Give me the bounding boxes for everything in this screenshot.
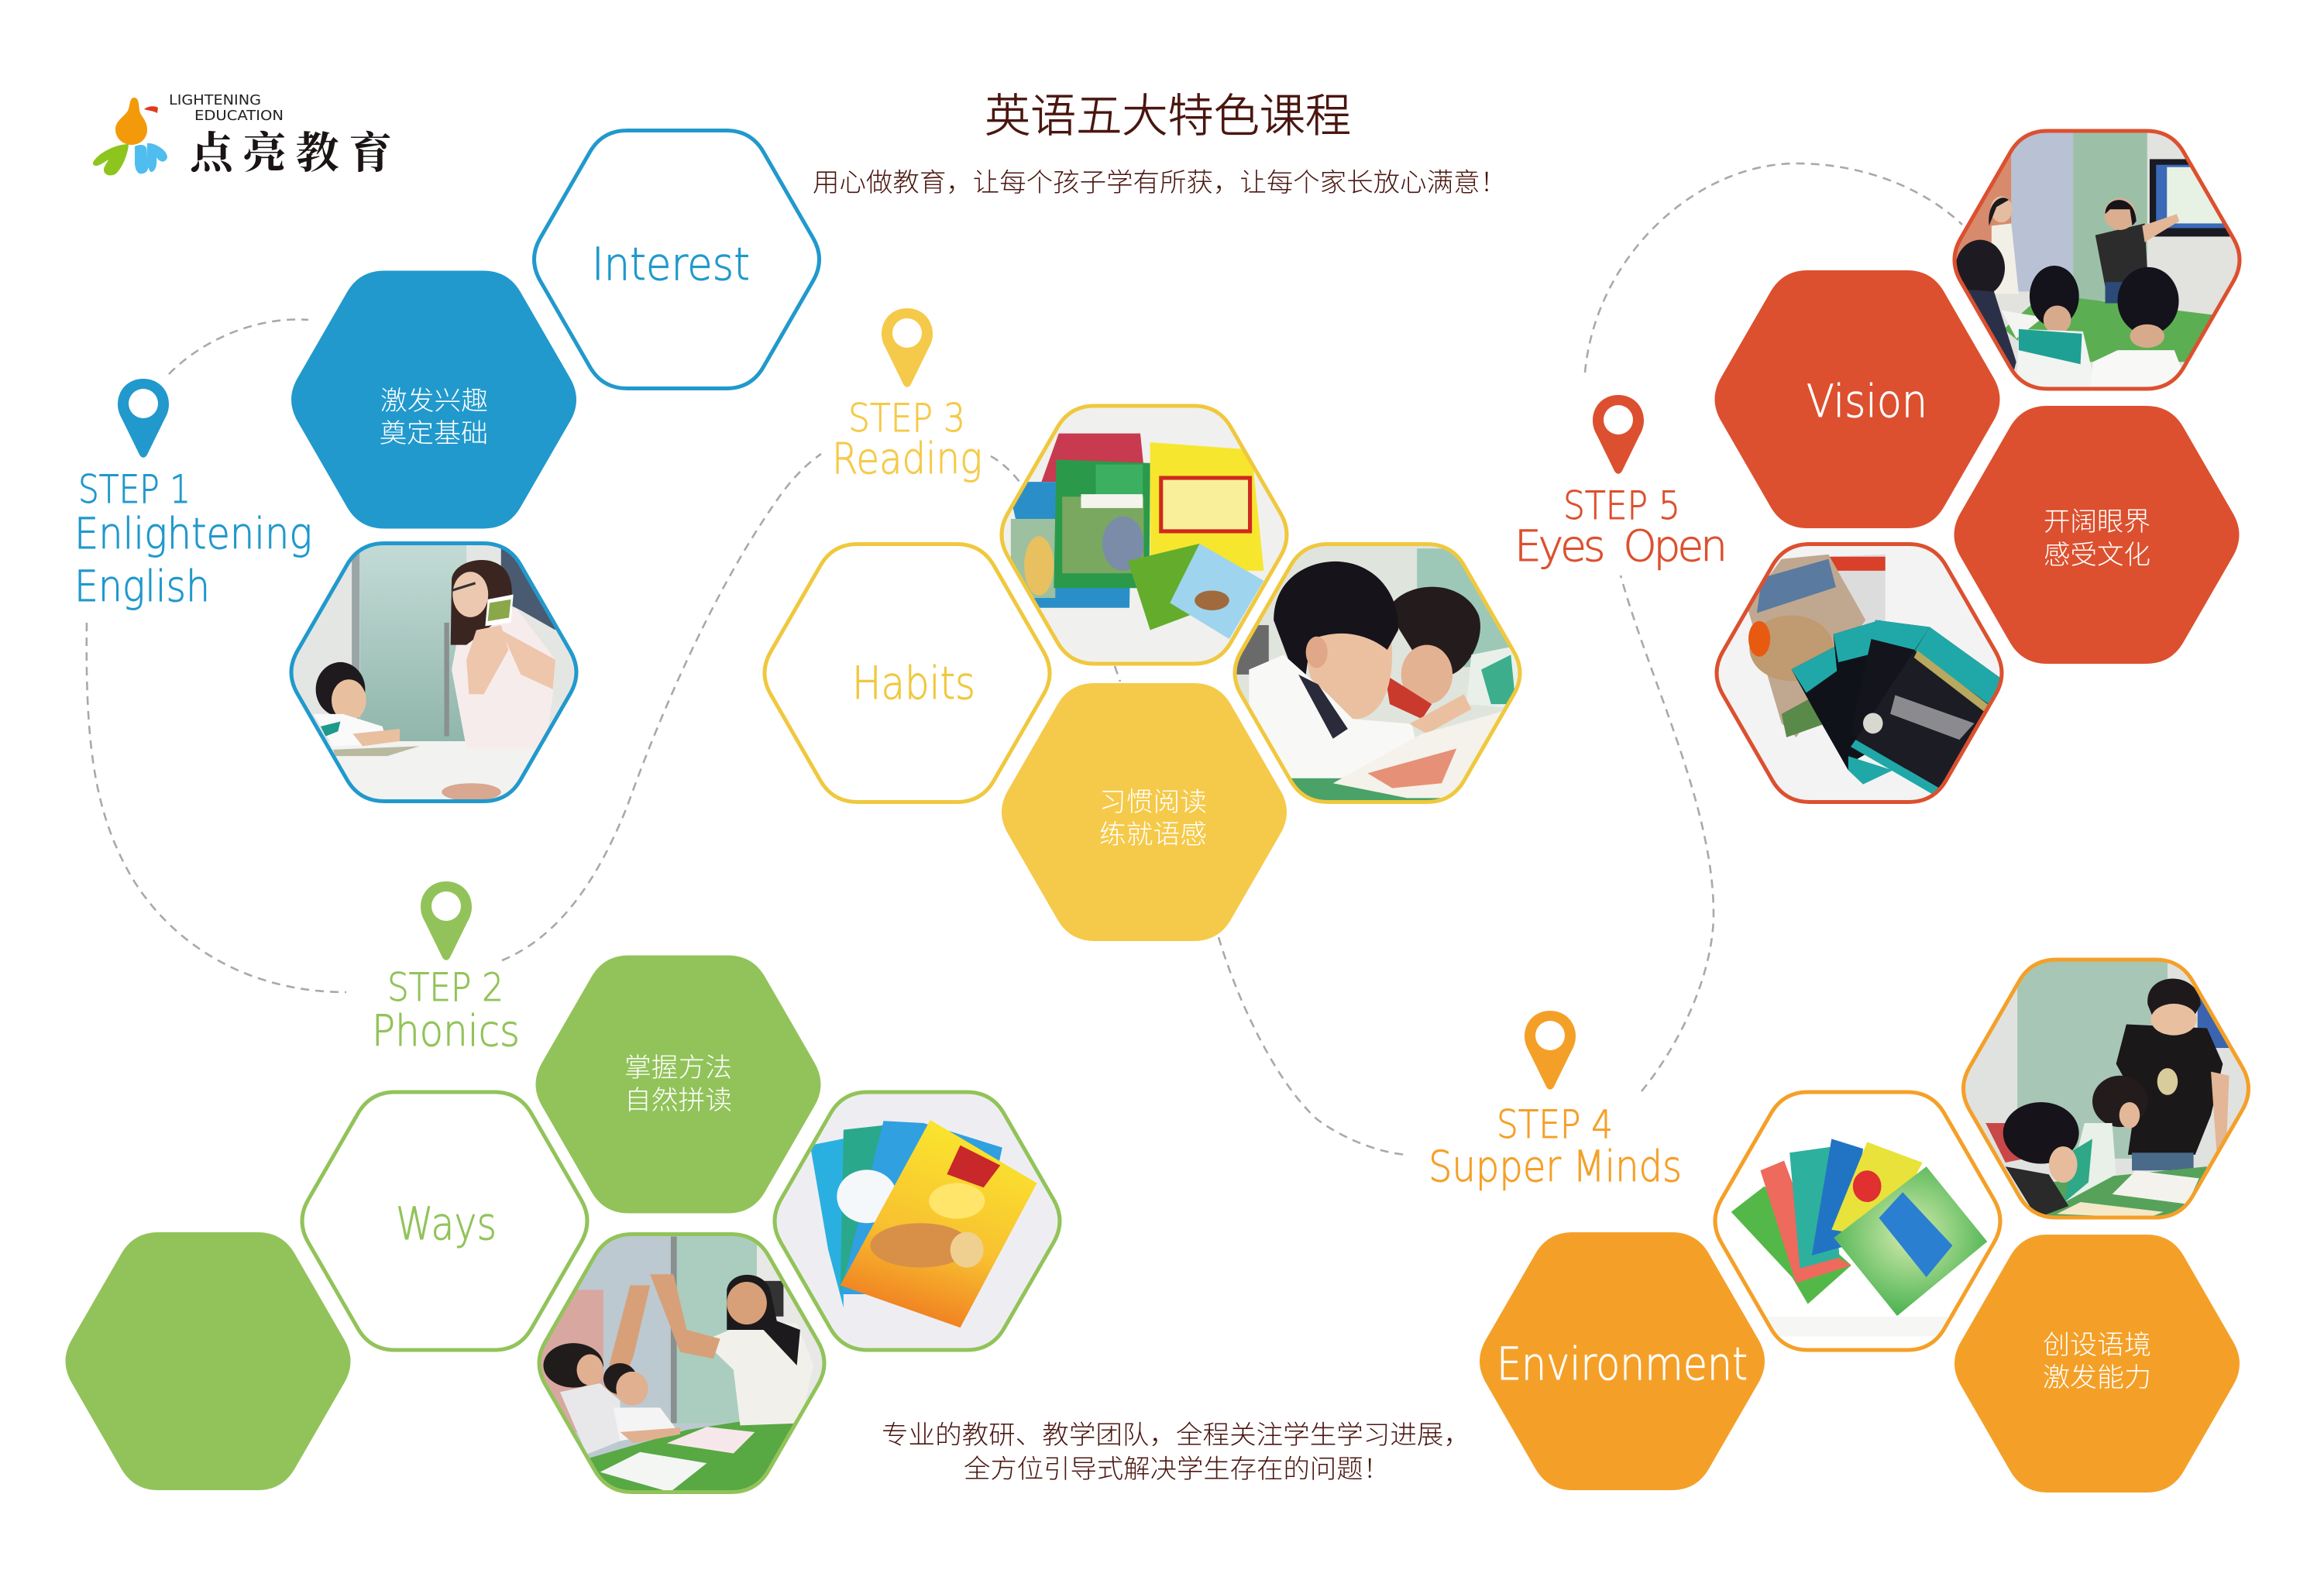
label: step 5 bbox=[1514, 483, 1728, 571]
label: step 2: Phonics bbox=[372, 1006, 520, 1056]
dashed route: step 4 to step 5 bbox=[1621, 575, 1714, 1091]
label: step 3: Reading bbox=[832, 434, 982, 483]
logo bbox=[93, 92, 392, 178]
logo chinese name: 点亮教育 bbox=[190, 130, 392, 178]
title: 英语五大特色课程 bbox=[985, 91, 1351, 142]
subtitle: 用心做教育，让每个孩子学有所获，让每个家长放心满意！ bbox=[813, 168, 1507, 198]
hexagon filled: environment: Environment bbox=[1497, 1338, 1748, 1390]
dashed route: step 5 to vision photo bbox=[1585, 163, 1962, 373]
logo english name: LIGHTENING bbox=[169, 92, 261, 108]
photo hexagon: super minds books bbox=[1709, 1087, 2006, 1356]
panel: step 5 eyes open bbox=[1514, 127, 2246, 808]
hexagon filled: master methods: 自然拼读 bbox=[624, 1086, 732, 1115]
hexagon filled: vision bbox=[1715, 270, 2000, 528]
hexagon outline: ways bbox=[302, 1092, 587, 1350]
label: step 4: STEP 4 bbox=[1497, 1102, 1613, 1147]
photo hexagon: classroom presentation bbox=[1950, 127, 2246, 395]
photo hexagon: cambridge books bbox=[1712, 541, 2009, 808]
hexagon outline: habits: Habits bbox=[852, 657, 975, 709]
hexagon filled: create context bbox=[1954, 1235, 2240, 1493]
hexagon filled: blank green bbox=[65, 1232, 350, 1490]
dashed route: step 2 to step 3 bbox=[502, 454, 821, 960]
bottom caption: 全方位引导式解决学生存在的问题！ bbox=[964, 1455, 1390, 1484]
label: step 1: STEP 1 bbox=[78, 467, 191, 512]
panel: step 4 supper minds bbox=[1428, 957, 2258, 1493]
hexagon filled: master methods bbox=[536, 956, 821, 1213]
label: step 5: Eyes Open bbox=[1514, 521, 1728, 571]
logo english name bbox=[169, 92, 284, 124]
label: step 3 bbox=[832, 396, 982, 483]
hexagon filled: master methods: 掌握方法 bbox=[624, 1053, 732, 1083]
pin: step 4 bbox=[1525, 1011, 1576, 1090]
hexagon outline: interest: Interest bbox=[592, 238, 750, 290]
hexagon filled: spark interest: 激发兴趣 bbox=[380, 386, 488, 416]
hexagon filled: broaden horizons: 感受文化 bbox=[2044, 541, 2150, 570]
pin: step 3 bbox=[882, 308, 933, 387]
hexagon outline: interest bbox=[535, 130, 820, 389]
pin: step 2 bbox=[421, 881, 472, 960]
label: step 4 bbox=[1428, 1102, 1682, 1191]
photo hexagon: phonics books bbox=[770, 1090, 1067, 1355]
hexagon filled: spark interest bbox=[291, 271, 576, 528]
pin: step 5 bbox=[1593, 395, 1644, 474]
pin: step 1 bbox=[118, 379, 169, 458]
panel: step 3 reading bbox=[765, 308, 1525, 941]
hexagon outline: habits bbox=[765, 544, 1050, 802]
photo hexagon: children reading bbox=[1229, 541, 1525, 808]
dashed route: step 1 to step 2 bbox=[87, 623, 346, 992]
label: step 4: Supper Minds bbox=[1428, 1142, 1682, 1191]
dashed route: step 1 to interest hexagon bbox=[169, 319, 308, 374]
label: step 1: English bbox=[74, 562, 210, 611]
hexagon filled: reading habits: 练就语感 bbox=[1099, 820, 1207, 850]
label: step 1: Enlightening bbox=[74, 509, 312, 558]
label: step 2 bbox=[372, 965, 520, 1056]
bottom caption bbox=[882, 1421, 1470, 1484]
hexagon filled: environment bbox=[1480, 1232, 1765, 1490]
hexagon filled: create context: 激发能力 bbox=[2043, 1363, 2151, 1393]
dashed route: reading label to book hexagon bbox=[991, 456, 1019, 482]
hexagon filled: create context: 创设语境 bbox=[2043, 1331, 2151, 1360]
photo hexagon: storybooks bbox=[997, 403, 1294, 669]
hexagon filled: broaden horizons: 开阔眼界 bbox=[2044, 507, 2150, 537]
dashed route: step 3 to step 4 bbox=[1219, 937, 1408, 1155]
hexagon filled: reading habits: 习惯阅读 bbox=[1099, 788, 1207, 817]
hexagon filled: vision: Vision bbox=[1807, 375, 1927, 428]
hexagon filled: spark interest: 奠定基础 bbox=[380, 419, 488, 448]
panel: step 2 phonics bbox=[65, 881, 1067, 1499]
label: step 3: STEP 3 bbox=[848, 396, 965, 441]
label: step 5: STEP 5 bbox=[1563, 483, 1680, 528]
label: step 2: STEP 2 bbox=[387, 965, 504, 1010]
hexagon filled: broaden horizons bbox=[1954, 406, 2239, 664]
photo hexagon: teacher helping pupils bbox=[1954, 957, 2258, 1222]
photo hexagon: teacher with flashcard and girl bbox=[284, 536, 585, 812]
hexagon filled: reading habits bbox=[1002, 683, 1287, 941]
hexagon outline: ways: Ways bbox=[396, 1197, 497, 1250]
logo icon: flame and petals bbox=[93, 98, 167, 175]
panel: step 1 enlightening english bbox=[74, 130, 820, 812]
photo hexagon: teacher high five with pupils bbox=[537, 1232, 830, 1499]
label: step 1 bbox=[74, 467, 312, 611]
dashed route: between book hexagon and yellow hexagon bbox=[1115, 666, 1120, 682]
bottom caption: 专业的教研、教学团队，全程关注学生学习进展， bbox=[882, 1421, 1470, 1450]
logo english name: EDUCATION bbox=[194, 108, 284, 124]
